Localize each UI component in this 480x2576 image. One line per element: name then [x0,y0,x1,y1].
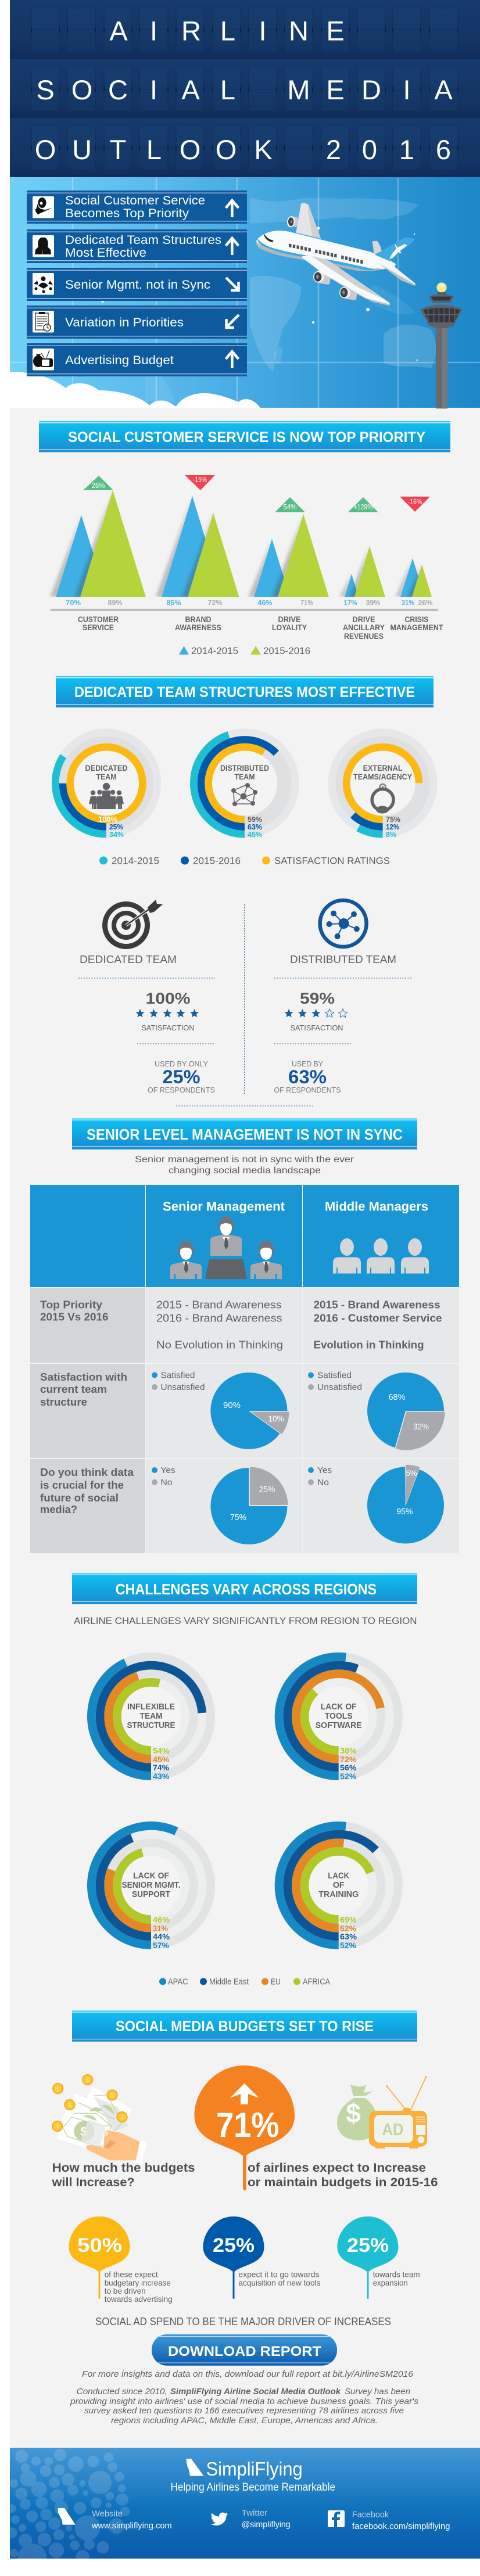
value labels: 46% [258,598,273,607]
table row: satisfaction: Satisfaction with [40,1371,127,1383]
category labels: ANCILLARY [343,623,385,632]
panel: distributed team comparison [274,900,411,1094]
icon: clipboard and clock [33,311,54,332]
text: budget question: How much the budgets [52,2161,195,2175]
pie legend: senior data: Yes [160,1466,175,1475]
ring chart: lack of training: 52% [340,1941,357,1950]
ring chart: dedicated team [52,728,161,839]
intro text: changing social media landscape [169,1166,321,1176]
ring chart: inflexible team structure: TEAM [139,1712,163,1721]
ring chart: lack of training: LACK [328,1871,350,1881]
ring chart: inflexible team structure: 54% [153,1746,170,1755]
heading banner [72,2011,417,2042]
panel: distributed team comparison: OF RESPONDENTS [274,1086,341,1094]
text: report link: For more insights and data on this, download our full report at bit.ly/AirlineSM2016 [82,2369,414,2379]
pie legend: middle satisfaction [308,1371,362,1392]
ring chart: external teams: TEAMS/AGENCY [353,773,412,781]
heading banner [56,676,434,707]
text: budget question: will Increase? [52,2175,135,2189]
pie chart: senior satisfaction 90/10: 10% [268,1414,284,1424]
heading banner: SENIOR LEVEL MANAGEMENT IS NOT IN SYNC [87,1126,403,1143]
sign: dedicated team structures [27,229,247,263]
change marker: 26%: 26% [92,482,105,490]
pie legend: middle data [308,1466,332,1488]
icon: network [231,783,257,806]
contact: facebook [328,2510,450,2531]
pie chart: middle data 95/5: 5% [406,1468,417,1478]
section: budgets [52,2011,438,2426]
footer [10,2448,480,2559]
panel: distributed team comparison: USED BY [292,1059,323,1068]
section: social customer service priority [39,421,450,656]
ring chart: distributed team: TEAM [235,773,255,781]
value labels [66,598,433,607]
legend: regions: Middle East [209,1977,249,1986]
sign: social customer service: Becomes Top Priority [65,206,189,220]
change marker: -16%: -16% [408,498,422,506]
sign: senior management [27,268,247,301]
icon: up arrow [230,2083,259,2104]
download button [152,2334,337,2366]
text: survey description [70,2387,419,2426]
change marker: +129% [348,497,378,512]
illustration: hand with cash and coins: $ [80,2124,87,2139]
ring chart: external teams: 12% [386,823,399,831]
ring chart: external teams: EXTERNAL [363,764,403,773]
text: budget statement: of airlines expect to Increase [248,2161,426,2175]
ring chart: distributed team: 45% [248,831,262,839]
table row: data crucial [30,1459,459,1553]
contact: facebook: Facebook [352,2510,389,2520]
pie legend: middle satisfaction: Unsatisfied [317,1383,362,1392]
table header row [30,1185,459,1287]
text: team share: expansion [373,2278,408,2287]
pie legend: senior data [152,1466,175,1488]
value labels: 85% [166,598,181,607]
ring chart: lack of tools software: 38% [340,1746,357,1755]
ring chart: external teams: 8% [386,831,396,839]
sign text: Variation in Priorities [65,315,184,329]
ring chart: lack of training: OF [333,1881,345,1890]
legend: team rings [99,855,390,867]
ring chart: inflexible team structure: STRUCTURE [127,1721,175,1730]
icon: money bag and tv [33,349,54,371]
change marker: -15% [185,475,215,490]
table row: data crucial: is crucial for the [40,1479,124,1491]
illustration: hand with cash and coins: $ [86,2077,89,2083]
value labels: 89% [108,598,123,607]
legend: regions: APAC [168,1977,188,1986]
sign: dedicated team structures: Most Effective [65,246,146,260]
icon: headset agent [33,196,54,218]
legend [179,645,310,656]
ring chart: distributed team [190,728,299,839]
panel: dedicated team comparison: SATISFACTION [142,1023,194,1032]
heading banner [72,1573,417,1604]
pie legend: senior satisfaction: Satisfied [160,1371,195,1380]
table row: satisfaction: current team [40,1383,107,1395]
legend: team rings: SATISFACTION RATINGS [274,855,390,867]
heading banner: SOCIAL MEDIA BUDGETS SET TO RISE [116,2018,374,2035]
text: team share: towards team [373,2270,420,2279]
control tower [420,282,463,408]
title line: SOCIAL MEDIA: SOCIALMEDIA [36,74,453,105]
pie legend: middle satisfaction: Satisfied [317,1371,352,1380]
subheading: AIRLINE CHALLENGES VARY SIGNIFICANTLY FROM REGION TO REGION [74,1616,417,1626]
ring chart: distributed team: 63% [248,823,262,831]
ring chart: inflexible team structure: 45% [153,1755,170,1764]
illustration: money bag and advertising tv: $ [346,2098,361,2128]
ring chart: dedicated team: 25% [109,823,123,831]
icon: handshake ring [372,783,393,813]
pie chart: middle satisfaction 68/32: 32% [413,1422,429,1432]
balloon: 25 percent team [337,2216,399,2299]
sign: advertising budget [27,343,247,376]
illustration: hand with cash and coins: $ [110,2093,114,2099]
category labels: LOYALITY [272,623,307,632]
balloon: 25 percent team: 25% [347,2234,389,2257]
table header row: Middle Managers [325,1199,428,1214]
change marker: 26% [83,476,113,490]
text: survey description: regions including APAC, Middle East, Europe, Americas and Africa. [111,2416,378,2426]
balloon: 71 percent: 71% [216,2106,279,2144]
ring chart: lack of tools software: LACK OF [321,1702,357,1712]
ring chart: external teams [328,728,438,839]
text: advertising share: of these expect [105,2270,158,2279]
text: budget question [52,2161,195,2189]
table row: top priority: Evolution in Thinking [314,1338,424,1351]
category labels: AWARENESS [175,623,221,632]
pie chart: middle data 95/5 [367,1464,444,1543]
table row: top priority: No Evolution in Thinking [156,1338,283,1351]
rating stars: five of five [135,1009,199,1017]
text: budget statement [248,2161,438,2189]
contact: facebook: facebook.com/simpliflying [352,2521,450,2531]
ring chart: inflexible team structure: INFLEXIBLE [127,1702,175,1712]
panel: dedicated team comparison: USED BY ONLY [155,1059,208,1068]
illustration: hand with cash and coins: $ [120,2114,124,2121]
panel: distributed team comparison: 59% [300,990,335,1007]
download button: DOWNLOAD REPORT [168,2344,321,2359]
table row: top priority [30,1288,459,1363]
pie legend: senior satisfaction: Unsatisfied [160,1383,205,1392]
balloon: 50 percent [69,2216,130,2299]
text: survey description: Survey has been [345,2387,410,2397]
value labels: 71% [300,598,313,607]
section: senior management [30,1119,459,1553]
legend: regions: EU [271,1977,281,1986]
value labels: 17% [344,598,357,607]
legend: team rings: 2014-2015 [112,855,159,867]
icon: senior executives at table [170,1216,282,1279]
section: regional challenges [72,1573,417,1986]
icon: up arrow [225,238,238,255]
ring chart: lack of senior management support [87,1821,215,1950]
text: advertising share [105,2270,173,2304]
ring chart: lack of senior management support: 46% [153,1915,170,1924]
ring chart: dedicated team: TEAM [96,773,116,781]
sign text: Advertising Budget [65,353,174,367]
ring chart: lack of training: TRAINING [318,1890,359,1899]
ring chart: lack of tools software: 52% [340,1772,357,1781]
ring chart: dedicated team: DEDICATED [85,764,128,773]
ring chart: lack of tools software: SOFTWARE [316,1721,362,1730]
pie legend: senior data: No [160,1478,172,1488]
panel: departures board title [10,0,480,177]
sign text: Senior Mgmt. not in Sync [65,278,210,292]
category labels: DRIVE [352,615,375,624]
icon: up arrow [225,351,238,368]
page background [10,408,480,2448]
ring chart: distributed team: DISTRIBUTED [220,764,269,773]
legend: 2014-2015 [191,645,238,656]
heading banner: SOCIAL CUSTOMER SERVICE IS NOW TOP PRIORITY [68,429,425,445]
pie chart: senior data 75/25 [210,1467,288,1544]
pie chart: senior data 75/25: 75% [230,1512,246,1522]
balloon: 50 percent: 50% [77,2234,122,2257]
value labels: 31% [402,598,414,607]
pie chart: senior satisfaction 90/10 [210,1373,289,1449]
category labels: REVENUES [344,632,384,641]
category labels: CRISIS [404,615,429,624]
panel: dedicated team comparison: DEDICATED TEAM [80,953,177,965]
balloon: 25 percent tools [203,2216,264,2299]
sign text: Social Customer Service [65,193,205,207]
heading banner: DEDICATED TEAM STRUCTURES MOST EFFECTIVE [74,684,415,700]
icon: team silhouettes [33,235,54,257]
panel: dedicated team comparison [78,900,215,1094]
icon: down-right arrow [226,278,238,290]
title line: AIRLINE: AIRLINE [109,15,345,46]
comparison table [30,1185,459,1553]
contact: website: www.simpliflying.com [91,2521,172,2531]
category labels [78,615,443,641]
panel: dedicated team comparison: OF RESPONDENTS [148,1086,215,1094]
value labels: 70% [66,598,81,607]
text: survey description: survey asked ten questions to 166 executives representing 78 airlines across five [84,2406,404,2416]
text: team share [373,2270,420,2287]
sky dots [101,227,418,361]
icon: down-left arrow [227,315,239,328]
icon: target [105,900,163,947]
airplane illustration [256,203,415,306]
text: advertising share: budgetary increase [105,2278,171,2287]
icon: management circle [33,273,54,295]
heading banner [72,1119,417,1149]
table row: satisfaction: structure [40,1396,87,1408]
table row: data crucial: future of social [40,1492,119,1504]
legend: team rings: 2015-2016 [193,855,241,867]
ring chart: lack of tools software [275,1652,403,1781]
ring chart: dedicated team: 100% [98,815,117,824]
pie legend: middle data: Yes [317,1466,332,1475]
contact: twitter: @simpliflying [242,2520,291,2530]
icon: group of people [89,783,124,809]
pie chart: middle data 95/5: 95% [396,1507,413,1517]
ring chart: lack of training: 69% [340,1915,357,1924]
illustration: hand with cash and coins [52,2074,146,2164]
ring chart: lack of senior management support: 31% [153,1924,169,1933]
table row: satisfaction [30,1364,459,1458]
illustration: hand with cash and coins: $ [56,2124,59,2130]
ring chart: lack of senior management support: SUPPORT [132,1890,170,1899]
change marker: -15%: -15% [193,476,207,484]
icon: network circle [320,900,367,947]
pie legend: senior satisfaction [152,1371,205,1392]
legend: regions: AFRICA [303,1977,330,1986]
ring chart: lack of senior management support: 57% [153,1941,170,1950]
illustration: money bag and advertising tv: AD [382,2121,403,2139]
table header row: Senior Management [163,1199,285,1214]
ring chart: lack of senior management support: SENIOR MGMT. [122,1881,180,1890]
change marker: +129%: +129% [353,503,373,511]
illustration: hand with cash and coins: $ [68,2102,71,2108]
text: tools share: expect it to go towards [238,2270,319,2279]
change marker: 54% [275,497,305,512]
balloon: 25 percent tools: 25% [213,2234,255,2257]
panel: distributed team comparison: DISTRIBUTED TEAM [290,953,396,965]
table row: top priority: 2016 - Customer Service [314,1312,442,1324]
text: tools share [238,2270,320,2287]
text: survey description: providing insight into airlines' use of social media to achieve business goals. This year's [70,2397,419,2406]
logo: SimpliFlying: SimpliFlying [206,2458,303,2480]
table row: data crucial: Do you think data [40,1466,134,1478]
text: budget statement: or maintain budgets in 2015-16 [248,2175,438,2189]
value labels: 72% [208,598,223,607]
ring chart: inflexible team structure [87,1652,215,1781]
pie chart: middle satisfaction 68/32: 68% [388,1392,406,1402]
category labels: CUSTOMER [78,615,119,624]
panel: distributed team comparison: 63% [288,1066,327,1087]
table row: data crucial: media? [40,1503,77,1515]
table row: top priority: 2016 - Brand Awareness [156,1312,282,1324]
value labels: 39% [366,598,381,607]
category labels: BRAND [185,615,212,624]
pie legend: middle data: No [317,1478,329,1488]
contact: twitter [210,2508,291,2530]
contact: website: Website [92,2509,123,2518]
cloud [10,372,260,408]
ring chart: lack of tools software: 56% [340,1763,357,1772]
pie chart: senior data 75/25: 25% [259,1485,275,1494]
statement: social ad spend: SOCIAL AD SPEND TO BE THE MAJOR DRIVER OF INCREASES [95,2316,391,2327]
table row: top priority: Top Priority [40,1299,103,1310]
table row: top priority: 2015 Vs 2016 [40,1310,108,1323]
ring chart: lack of training: 63% [340,1932,357,1941]
text: tools share: acquisition of new tools [238,2278,320,2287]
ring chart: lack of training: 52% [340,1924,357,1933]
illustration: hand with cash and coins: $ [56,2086,60,2092]
triangle chart [50,475,443,656]
text: advertising share: towards advertising [105,2294,173,2304]
panel: dedicated team comparison: 100% [145,990,191,1007]
icon: middle managers [333,1238,429,1273]
text: survey description: Conducted since 2010, [77,2387,167,2397]
section: dedicated team structures [52,676,438,1106]
legend: regions [159,1977,330,1986]
pie chart: senior satisfaction 90/10: 90% [223,1400,241,1410]
change marker: 54%: 54% [284,503,296,511]
pie chart: middle satisfaction 68/32 [367,1373,445,1450]
change marker: -16% [400,497,430,512]
contact: twitter: Twitter [242,2508,267,2518]
table row: top priority: 2015 - Brand Awareness [314,1299,440,1310]
ring chart: lack of tools software: 72% [340,1755,357,1764]
panel: distributed team comparison: SATISFACTION [291,1023,343,1032]
ring chart: lack of senior management support: LACK OF [133,1871,169,1881]
panel: dedicated team comparison: 25% [163,1066,200,1087]
category labels: DRIVE [278,615,301,624]
ring chart: lack of training [275,1821,403,1950]
ring chart: lack of senior management support: 44% [153,1932,170,1941]
panel: sky hero [10,177,480,408]
value labels: 26% [418,598,433,607]
legend: 2015-2016 [263,645,310,656]
category labels: MANAGEMENT [391,623,443,632]
text: survey description: SimpliFlying Airline Social Media Outlook [170,2387,341,2397]
text: advertising share: to be driven [105,2286,146,2295]
heading banner [39,421,450,452]
ring chart: distributed team: 59% [248,815,262,824]
intro text: Senior management is not in sync with the ever [135,1155,354,1165]
ring chart: external teams: 75% [386,815,400,824]
contact: website [58,2508,172,2531]
ring chart: lack of tools software: TOOLS [325,1712,353,1721]
sign: social customer service [27,191,247,224]
balloon: 71 percent [194,2065,295,2190]
ring chart: dedicated team: 34% [109,831,124,839]
intro text [135,1155,354,1176]
divider [244,904,245,1094]
illustration: money bag and advertising tv [337,2076,427,2149]
ring chart: inflexible team structure: 74% [153,1763,170,1772]
sign: variation in priorities [27,306,247,339]
icon: up arrow [225,200,238,217]
ring chart: inflexible team structure: 43% [153,1772,170,1781]
rating stars: three of five [284,1009,348,1017]
title line: OUTLOOK 2016: OUTLOOK2016 [35,134,451,165]
table row: top priority: 2015 - Brand Awareness [156,1299,281,1310]
category labels: SERVICE [83,623,114,632]
tagline: Helping Airlines Become Remarkable [171,2481,335,2494]
heading banner: CHALLENGES VARY ACROSS REGIONS [116,1580,377,1598]
sign text: Dedicated Team Structures [65,233,221,247]
